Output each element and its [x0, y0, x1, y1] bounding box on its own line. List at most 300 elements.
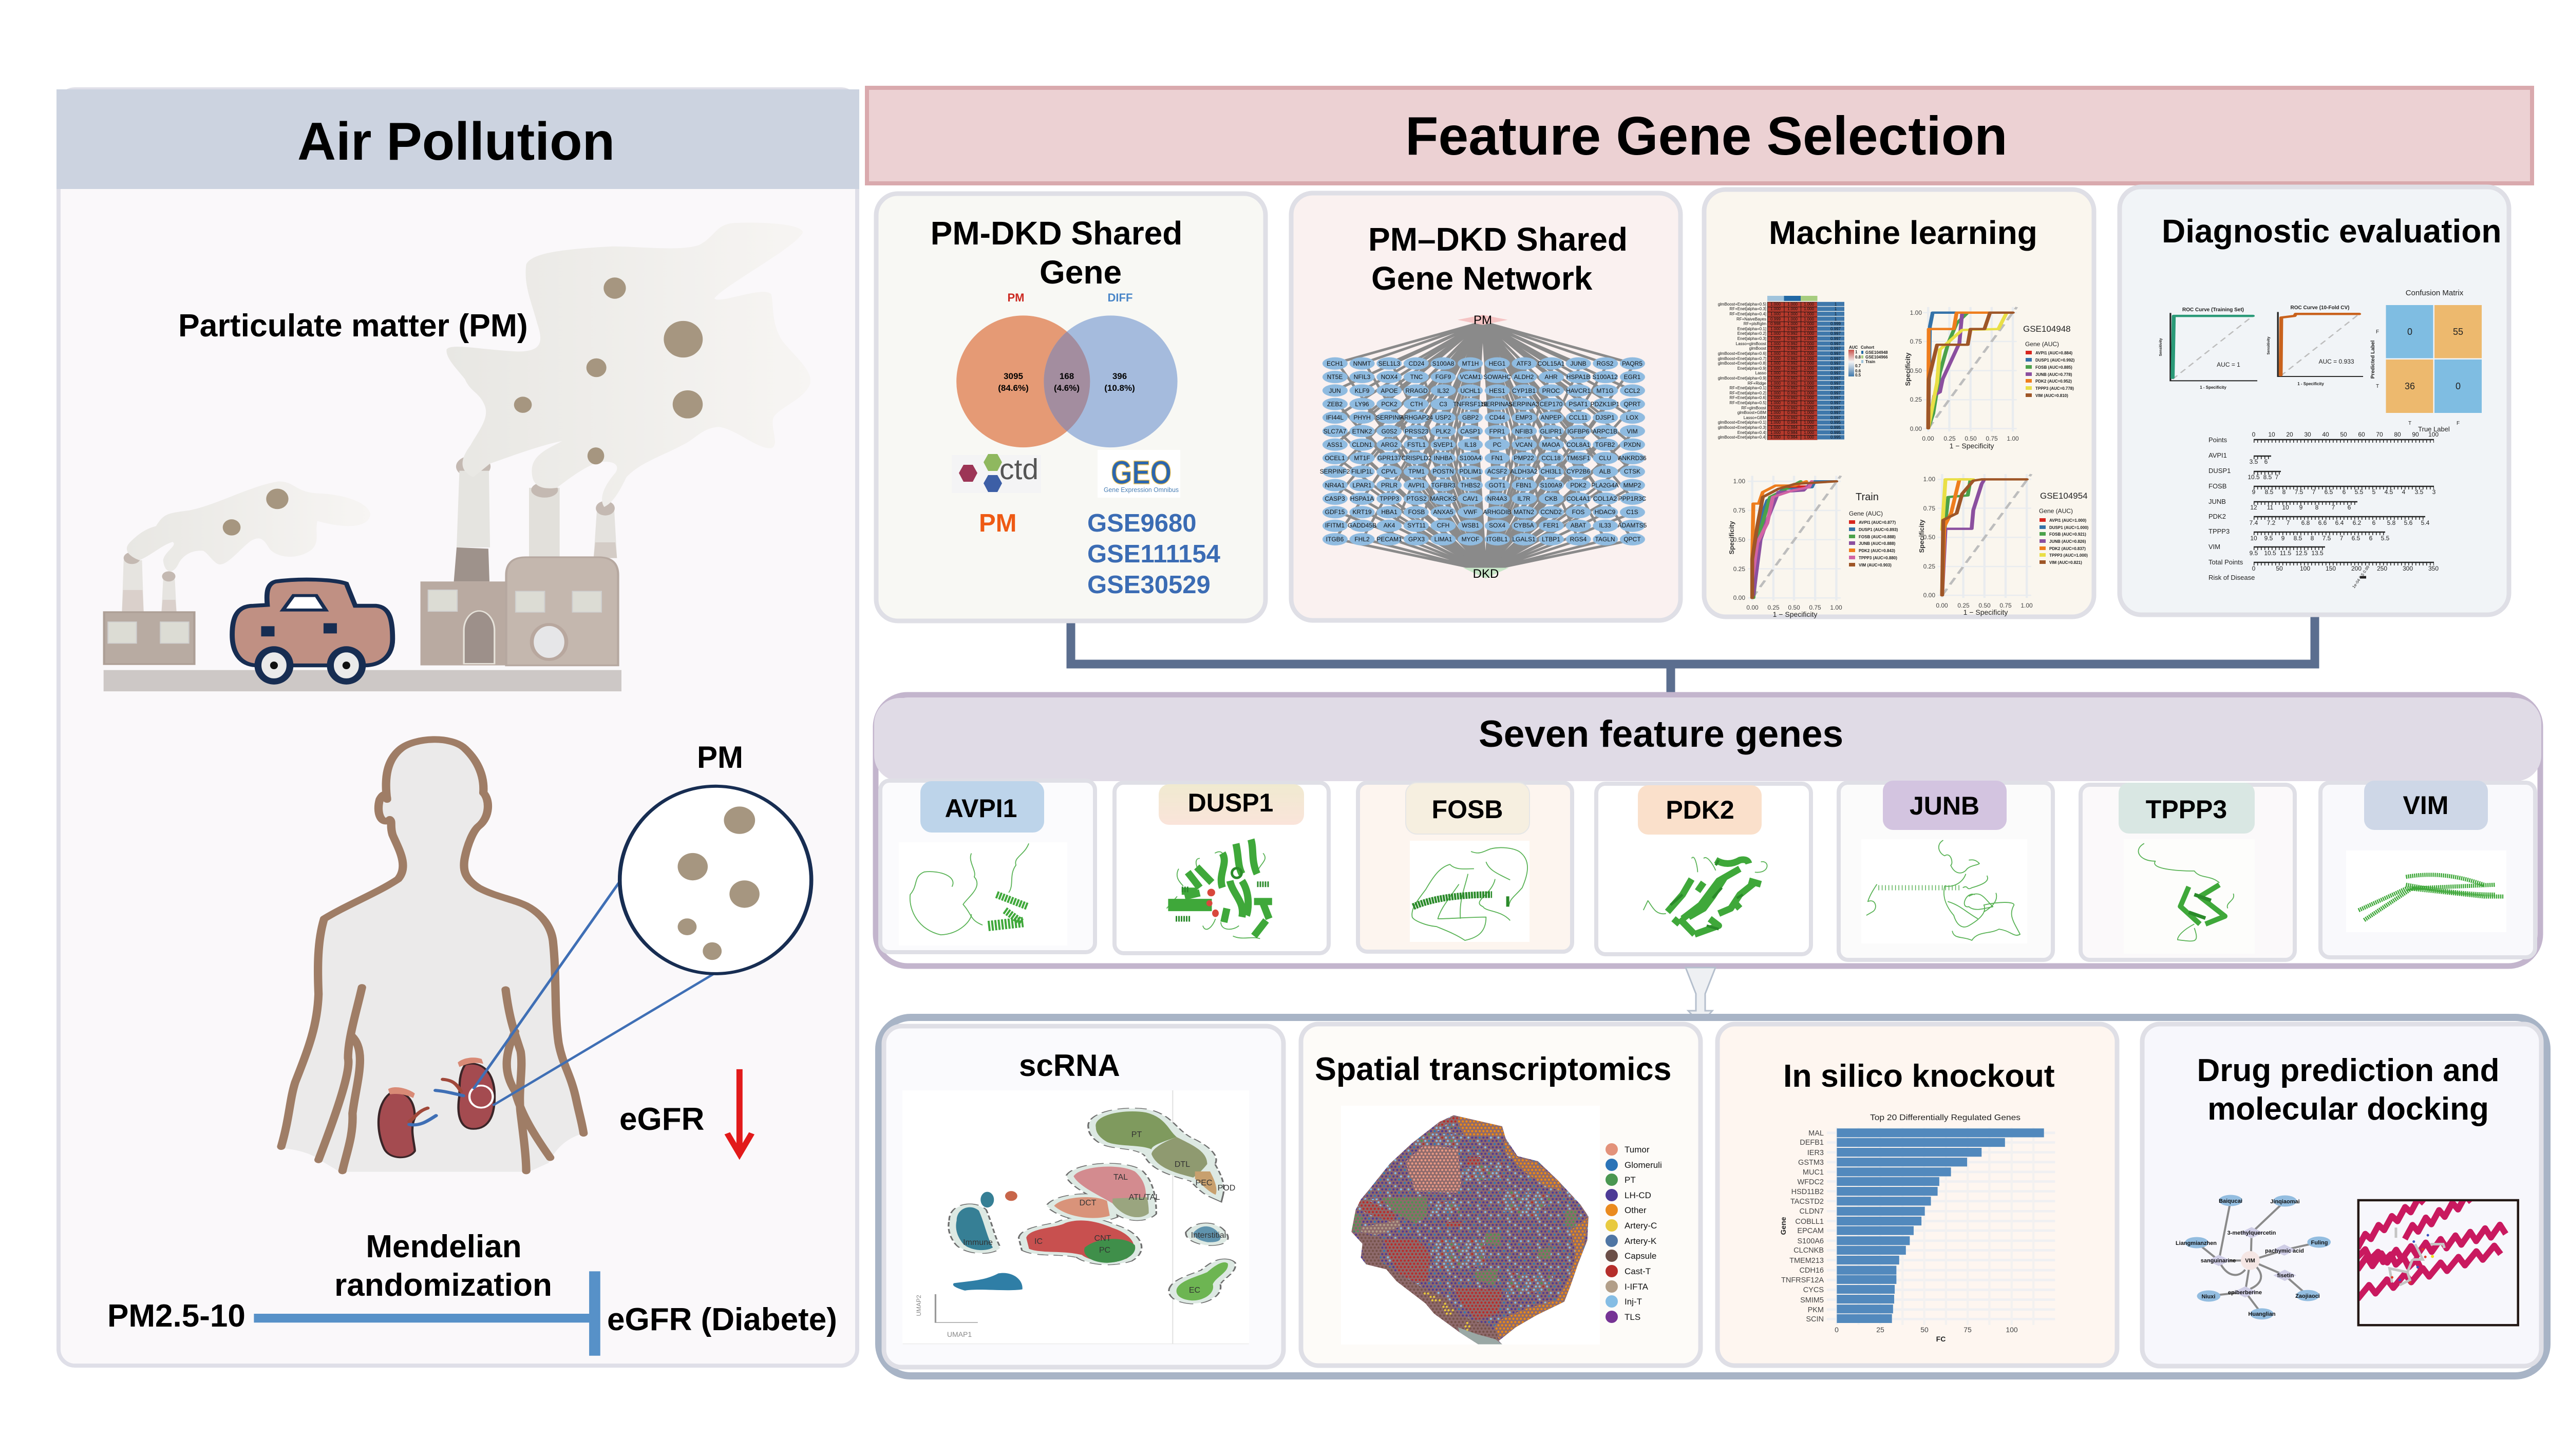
spatial legend: [1606, 1143, 1662, 1323]
bar chart axes: Gene: [1779, 1217, 1787, 1235]
heatmap: 0.992: [1787, 371, 1798, 375]
gene names: CAV1: [1463, 495, 1479, 502]
ROC training and cross-validation curves: 1 - Specificity: [2297, 382, 2324, 386]
gene card TPPP3: TPPP3: [2146, 795, 2227, 824]
gene names: FHL2: [1354, 536, 1370, 543]
bar chart gene labels: CDH16: [1799, 1266, 1824, 1275]
UMAP labels: ATL/TAL: [1129, 1193, 1160, 1202]
ROC chart GSE104954: 1.00: [1923, 476, 1935, 483]
heatmap: Enet[alpha=0.2]: [1738, 331, 1766, 336]
heatmap: 0.997: [1830, 376, 1841, 381]
nomogram: 7: [2340, 535, 2344, 542]
ROC chart Train: AVPI1 (AUC=0.877): [1859, 520, 1896, 525]
confusion matrix: T: [2376, 384, 2379, 389]
gene names: ANPEP: [1541, 414, 1561, 421]
gene names: VWF: [1464, 508, 1477, 516]
heatmap: RF+glmBoost: [1741, 406, 1767, 410]
heatmap: 0.992: [1787, 401, 1798, 405]
network node labels PM and DKD: PM: [1474, 313, 1492, 327]
smoke plume large: [446, 222, 810, 507]
heatmap: 0.992: [1787, 366, 1798, 371]
illustration: factories, smoke and car: [104, 222, 810, 691]
ROC chart Train: 1.00: [1830, 604, 1842, 611]
nomogram: 200: [2351, 565, 2362, 572]
venn diagram: [956, 315, 1178, 447]
ROC chart GSE104948: 0.00: [1910, 425, 1922, 432]
gene names: ASS1: [1327, 441, 1343, 448]
gene names: HSPA1B: [1566, 373, 1590, 381]
heatmap: glmBoost+GBM: [1738, 410, 1766, 415]
drug network labels: Jinqiaomai: [2270, 1199, 2300, 1205]
heatmap: 0.992: [1787, 415, 1798, 420]
nomogram: 6: [2369, 535, 2373, 542]
heatmap: 1.000: [1804, 312, 1815, 316]
gene names: S100A9: [1540, 482, 1562, 489]
nomogram: 6.4: [2335, 519, 2344, 526]
spatial legend: Other: [1625, 1205, 1647, 1215]
gene names: TAGLN: [1595, 536, 1615, 543]
bar chart gene labels: TACSTD2: [1790, 1198, 1824, 1206]
nomogram: 1e-04 0.5 0.99: [2351, 564, 2371, 589]
nomogram: 13.5: [2311, 550, 2324, 557]
heatmap: RF+Enet[alpha=0.5]: [1729, 401, 1766, 405]
ROC chart Train: Specificity: [1728, 521, 1735, 555]
heatmap: 1.000: [1770, 415, 1781, 420]
protein structure FOSB: [1412, 847, 1527, 940]
gene names: IFITM1: [1325, 522, 1345, 529]
gene names: FOS: [1572, 508, 1584, 516]
panel: seven feature genes: [874, 695, 2541, 966]
heatmap: glmBoost+Enet[alpha=0.7]: [1718, 356, 1766, 361]
ROC chart GSE104954: [1918, 474, 2089, 616]
heatmap: 1.000: [1787, 302, 1798, 307]
gene names: QPRT: [1623, 401, 1641, 408]
gene names: POSTN: [1432, 468, 1454, 475]
gene names: ANKRD36: [1618, 455, 1647, 462]
gene names: THBS2: [1461, 482, 1481, 489]
label: eGFR: eGFR: [619, 1102, 704, 1137]
nomogram: 9: [2252, 488, 2256, 496]
label: PM2.5-10: PM2.5-10: [107, 1298, 246, 1334]
nomogram: 6: [2372, 519, 2376, 526]
nomogram: 6.6: [2318, 519, 2327, 526]
drug network labels: Huanglian: [2248, 1311, 2276, 1317]
gene names: NT5E: [1327, 373, 1343, 381]
heatmap legend: GSE104966: [1865, 355, 1888, 360]
gene names: CLU: [1599, 455, 1611, 462]
drug network labels: fisetin: [2277, 1273, 2294, 1279]
gene card AVPI1: AVPI1: [945, 794, 1017, 823]
ROC chart GSE104948: 0.50: [1910, 367, 1922, 374]
heatmap: RF+Enet[alpha=0.1]: [1729, 386, 1766, 390]
ROC chart GSE104948: 1 − Specificity: [1950, 442, 1994, 450]
gene names: ACSF2: [1487, 468, 1507, 475]
gene names: MAOA: [1542, 441, 1560, 448]
gene names: G0S2: [1382, 428, 1398, 435]
gene names: JUNB: [1570, 360, 1587, 367]
nomogram: 3.5: [2415, 488, 2424, 496]
ROC chart GSE104954: DUSP1 (AUC=1.000): [2049, 525, 2089, 530]
gene names: PROC: [1542, 387, 1560, 394]
gene names: TM6SF1: [1566, 455, 1590, 462]
heatmap: glmBoost: [1749, 346, 1767, 351]
gene names: PCK2: [1381, 401, 1398, 408]
label: eGFR diabete: eGFR (Diabete): [607, 1302, 837, 1337]
heatmap: RF+Ridge: [1748, 381, 1767, 386]
gene names: PAQR5: [1622, 360, 1642, 367]
gene names: ANXA5: [1433, 508, 1453, 516]
UMAP labels: PEC: [1196, 1179, 1212, 1187]
heatmap: 1.000: [1770, 312, 1781, 316]
heatmap: 1.000: [1804, 410, 1815, 415]
heatmap: RF+Enet[alpha=0.6]: [1729, 395, 1766, 400]
nomogram: 30: [2304, 431, 2311, 438]
heatmap: 1.000: [1770, 381, 1781, 386]
gene names: MATN2: [1514, 508, 1534, 516]
gene names: CASP1: [1460, 428, 1481, 435]
heading: air pollution: Air Pollution: [297, 112, 615, 172]
arrow: from seven genes to analysis: [1686, 968, 1715, 1024]
nomogram: 5.5: [2355, 488, 2364, 496]
title: In silico knockout: [1783, 1058, 2055, 1094]
gene names: NR4A1: [1325, 482, 1345, 489]
gene names: CEP170: [1540, 401, 1563, 408]
gene names: HEG1: [1489, 360, 1506, 367]
panel: machine learning: [1704, 190, 2094, 618]
heatmap: 1.000: [1770, 351, 1781, 356]
logo: ctd: [952, 453, 1041, 493]
heatmap: 0.992: [1787, 351, 1798, 356]
nomogram: 8.5: [2263, 474, 2272, 481]
bar chart gene labels: CYCS: [1803, 1286, 1824, 1294]
heatmap: 0.995: [1830, 425, 1841, 430]
drug network: [2185, 1195, 2331, 1319]
ROC chart GSE104954: 1 − Specificity: [1963, 608, 2008, 616]
heatmap: glmBoost+Enet[alpha=0.5]: [1718, 302, 1766, 307]
ROC training and cross-validation curves: AUC = 1: [2217, 361, 2240, 368]
gene names: PTGS2: [1406, 495, 1427, 502]
heatmap legend: GSE104948: [1865, 350, 1888, 355]
ROC chart GSE104948: 0.00: [1922, 435, 1934, 442]
confusion matrix: T: [2408, 421, 2411, 426]
gene names: CCL18: [1541, 455, 1561, 462]
gene names: PDZK1IP1: [1591, 401, 1620, 408]
ROC chart Train: 0.50: [1733, 536, 1745, 543]
confusion matrix: 36: [2405, 381, 2415, 391]
gene names: SYT11: [1407, 522, 1426, 529]
spatial legend: Tumor: [1625, 1145, 1650, 1155]
gene names: FER1: [1543, 522, 1559, 529]
spatial legend: Inj-T: [1625, 1297, 1642, 1307]
heatmap: 1.000: [1770, 342, 1781, 346]
gene names: FPR1: [1489, 428, 1505, 435]
nomogram: 20: [2286, 431, 2293, 438]
gene card TPPP3: [2081, 783, 2295, 960]
heatmap: 1.000: [1804, 406, 1815, 410]
ROC chart GSE104954: PDK2 (AUC=0.837): [2049, 546, 2086, 551]
ROC chart GSE104948: AVPI1 (AUC=0.884): [2035, 351, 2072, 355]
ROC chart GSE104948: Specificity: [1904, 352, 1912, 386]
card: scRNA: [884, 1026, 1283, 1367]
gene names: SEL1L3: [1379, 360, 1401, 367]
nomogram: Risk of Disease: [2208, 574, 2255, 581]
ROC chart GSE104948: 0.75: [1910, 338, 1922, 345]
spatial legend: Capsule: [1625, 1251, 1656, 1261]
heatmap: 1.000: [1804, 336, 1815, 341]
heatmap: 1.000: [1804, 435, 1815, 440]
gene names: FILIP1L: [1351, 468, 1373, 475]
gene names: CD44: [1489, 414, 1505, 421]
heatmap: 1.000: [1804, 381, 1815, 386]
card: spatial transcriptomics: [1301, 1024, 1701, 1366]
ROC training and cross-validation curves: ROC Curve (Training Set): [2182, 307, 2244, 313]
gene card JUNB: [1839, 781, 2053, 960]
heatmap: 1.000: [1804, 386, 1815, 390]
UMAP labels: Interstitial: [1191, 1231, 1226, 1240]
venn labels: 168: [1060, 371, 1074, 381]
panel: diagnostic evaluation: [2120, 187, 2509, 615]
confusion matrix: 55: [2453, 327, 2463, 337]
ROC chart Train: TPPP3 (AUC=0.880): [1859, 556, 1897, 560]
UMAP labels: PC: [1099, 1246, 1110, 1255]
heatmap: glmBoost+Enet[alpha=0.8]: [1718, 361, 1766, 366]
bar chart gene labels: TMEM213: [1789, 1257, 1824, 1265]
gene names: TGFB2: [1595, 441, 1615, 448]
nomogram: 5.8: [2387, 519, 2396, 526]
venn labels: (84.6%): [998, 383, 1029, 393]
confusion matrix: Confusion Matrix: [2406, 289, 2464, 297]
nomogram: 10: [2268, 431, 2275, 438]
heatmap: 1.000: [1770, 366, 1781, 371]
ROC chart GSE104954: Gene (AUC): [2039, 507, 2073, 515]
smoke plume small: [127, 481, 370, 571]
gene names: CYP1B1: [1512, 387, 1536, 394]
nomogram: AVPI1: [2208, 451, 2227, 459]
nomogram: 3.5: [2250, 458, 2258, 465]
gene names: ECH1: [1327, 360, 1343, 367]
gene card AVPI1: [880, 781, 1095, 952]
nomogram: 100: [2428, 431, 2439, 438]
gene names: CTSK: [1624, 468, 1640, 475]
heatmap: 0.997: [1830, 395, 1841, 400]
inhibition line: [254, 1271, 595, 1356]
heatmap: 1.000: [1787, 317, 1798, 322]
panel title: Machine learning: [1769, 214, 2037, 251]
drug network labels: Baiqucai: [2219, 1198, 2242, 1204]
heatmap: 1.000: [1770, 420, 1781, 425]
heatmap: glmBoost+Enet[alpha=0.3]: [1718, 425, 1766, 430]
gene names: NNMT: [1353, 360, 1371, 367]
heatmap: 0.992: [1787, 342, 1798, 346]
heatmap: 1.000: [1804, 425, 1815, 430]
heatmap legend: 1: [1855, 350, 1858, 354]
nomogram: 100: [2300, 565, 2310, 572]
gene names: PC: [1493, 441, 1502, 448]
heatmap: 0.997: [1830, 406, 1841, 410]
gene names: CCL11: [1569, 414, 1588, 421]
logo: GEO: Gene Expression Omnibus: [1104, 486, 1179, 494]
nomogram: 60: [2358, 431, 2365, 438]
UMAP labels: DCT: [1080, 1199, 1097, 1207]
gene names: SERPINF2: [1320, 468, 1350, 475]
heatmap: 0.984: [1787, 435, 1798, 440]
protein structure JUNB: [1866, 840, 2020, 940]
heatmap: RF+NaiveBayes: [1736, 317, 1766, 322]
bar chart axes: 50: [1920, 1326, 1929, 1334]
gene names: RGS4: [1570, 536, 1587, 543]
heatmap: 1.000: [1770, 307, 1781, 311]
ROC training and cross-validation curves: Sensitivity: [2159, 338, 2163, 356]
gene names: AVPI1: [1408, 482, 1425, 489]
panel: downstream analysis frame: [879, 1017, 2547, 1376]
venn labels: 3095: [1004, 371, 1023, 381]
nomogram: TPPP3: [2208, 527, 2230, 535]
UMAP labels: CNT: [1094, 1234, 1111, 1243]
panel: air pollution: [56, 89, 859, 1366]
gene names: HES1: [1489, 387, 1505, 394]
bar chart gene labels: COBLL1: [1795, 1218, 1824, 1226]
gene names: GPX3: [1408, 536, 1425, 543]
gene names: CYB5A: [1514, 522, 1534, 529]
ROC chart Train: Gene (AUC): [1849, 510, 1883, 517]
gene names: FN1: [1491, 455, 1503, 462]
nomogram: 5.6: [2404, 519, 2413, 526]
bar chart axes: [1779, 1217, 2018, 1343]
gene names: RRAGD: [1405, 387, 1428, 394]
ROC chart GSE104948: GSE104948: [2023, 324, 2071, 334]
ROC chart GSE104948: PDK2 (AUC=0.952): [2035, 379, 2072, 384]
heatmap: 0.998: [1770, 322, 1781, 326]
ROC chart GSE104948: TPPP3 (AUC=0.778): [2035, 386, 2074, 391]
heatmap: 1.000: [1804, 391, 1815, 395]
title: Drug prediction and: [2197, 1053, 2499, 1088]
nomogram: 5.5: [2381, 535, 2390, 542]
gene names: COL15A1: [1538, 360, 1565, 367]
nomogram: 80: [2394, 431, 2401, 438]
gene names: CLDN1: [1352, 441, 1372, 448]
nomogram: 6.5: [2325, 488, 2333, 496]
nomogram: 6: [2264, 458, 2268, 465]
spatial legend: Cast-T: [1625, 1266, 1651, 1276]
heatmap: 1: [1835, 302, 1837, 307]
ROC training and cross-validation curves: ROC Curve (10-Fold CV): [2290, 305, 2350, 311]
bar chart title: Top 20 Differentially Regulated Genes: [1870, 1113, 2021, 1122]
heatmap: 1.000: [1770, 395, 1781, 400]
nomogram: 8.5: [2294, 535, 2302, 542]
gene names: ARHGAP24: [1400, 414, 1433, 421]
heatmap: 1.000: [1770, 425, 1781, 430]
heatmap: 1.000: [1804, 415, 1815, 420]
heatmap: 1: [1835, 317, 1837, 322]
bar chart gene labels: EPCAM: [1797, 1227, 1824, 1235]
spatial legend: Artery-C: [1625, 1221, 1657, 1231]
ROC chart Train: JUNB (AUC=0.888): [1859, 541, 1896, 546]
heatmap: RF+plsRglm: [1744, 322, 1766, 326]
heatmap: 0.999: [1830, 322, 1841, 326]
heatmap legend: [1848, 345, 1888, 377]
kidney left: [379, 1087, 436, 1158]
heatmap: 0.997: [1830, 415, 1841, 420]
ROC chart GSE104948: VIM (AUC=0.810): [2035, 393, 2068, 398]
spatial legend: TLS: [1625, 1312, 1640, 1322]
heatmap: 1.000: [1804, 361, 1815, 366]
ROC chart Train: [1728, 476, 1898, 618]
nomogram: 40: [2322, 431, 2329, 438]
gene names: AHR: [1544, 373, 1558, 381]
nomogram: 70: [2376, 431, 2383, 438]
bar chart gene labels: TNFRSF12A: [1781, 1276, 1824, 1284]
gene names: VCAN: [1515, 441, 1533, 448]
gene names: CRISPLD2: [1402, 455, 1432, 462]
gene names: LIMA1: [1434, 536, 1452, 543]
gene names: C3: [1439, 401, 1447, 408]
nomogram: Points: [2208, 436, 2227, 444]
gene names: PMP22: [1514, 455, 1534, 462]
heatmap: RF+Enet[alpha=0.4]: [1729, 312, 1766, 316]
ROC chart GSE104948: 0.50: [1965, 435, 1977, 442]
bar chart axes: 75: [1963, 1326, 1972, 1334]
gene names: SERPINF: [1376, 414, 1403, 421]
heatmap: 1.000: [1804, 342, 1815, 346]
gene names: ARPC1B: [1593, 428, 1617, 435]
heatmap: 0.997: [1830, 391, 1841, 395]
bar chart axes: 0: [1835, 1326, 1839, 1334]
UMAP labels: Immune: [963, 1238, 993, 1247]
ROC chart GSE104948: JUNB (AUC=0.778): [2035, 372, 2072, 377]
panel: PM-DKD shared gene network: [1291, 193, 1680, 620]
protein structure AVPI1: [910, 843, 1029, 935]
ROC chart Train: Train: [1856, 491, 1879, 503]
gene names: JUN: [1329, 387, 1341, 394]
heatmap: Lasso+GBM: [1744, 415, 1766, 420]
gene names: ALB: [1599, 468, 1611, 475]
venn labels: [998, 291, 1135, 393]
gene names: IL18: [1464, 441, 1477, 448]
gene names: NFIL3: [1354, 373, 1371, 381]
gene names: INHBA: [1434, 455, 1452, 462]
gene names: CTH: [1410, 401, 1423, 408]
nomogram: 0: [2252, 431, 2256, 438]
gene names: CCND2: [1540, 508, 1562, 516]
spatial legend: I-IFTA: [1625, 1282, 1649, 1292]
gene card DUSP1: [1115, 783, 1329, 953]
gene names: MYOF: [1462, 536, 1479, 543]
UMAP labels: PT: [1131, 1130, 1142, 1139]
heatmap: 0.997: [1830, 356, 1841, 361]
card: drug prediction and molecular docking: [2142, 1024, 2541, 1366]
network node labels PM and DKD: DKD: [1473, 567, 1499, 581]
heatmap: 0.997: [1830, 381, 1841, 386]
gene names: DJSP1: [1595, 414, 1615, 421]
heatmap: 1.000: [1804, 327, 1815, 331]
heatmap: 0.992: [1787, 381, 1798, 386]
spatial legend: LH-CD: [1625, 1190, 1651, 1200]
heatmap: 0.992: [1787, 386, 1798, 390]
gene names: ETNK2: [1352, 428, 1372, 435]
gene names: NFIB3: [1515, 428, 1533, 435]
heatmap: 1.000: [1804, 371, 1815, 375]
heatmap: 0.997: [1830, 331, 1841, 336]
gene names: MMP2: [1623, 482, 1641, 489]
gene names: CFH: [1437, 522, 1449, 529]
gene card DUSP1: DUSP1: [1188, 788, 1273, 817]
nomogram: 300: [2403, 565, 2413, 572]
bar chart gene labels: WFDC2: [1797, 1178, 1824, 1186]
ROC chart GSE104954: 0.50: [1923, 534, 1935, 541]
gene names: GOT1: [1489, 482, 1506, 489]
heatmap legend: 0.5: [1855, 373, 1861, 377]
gene names: C1S: [1626, 508, 1638, 516]
